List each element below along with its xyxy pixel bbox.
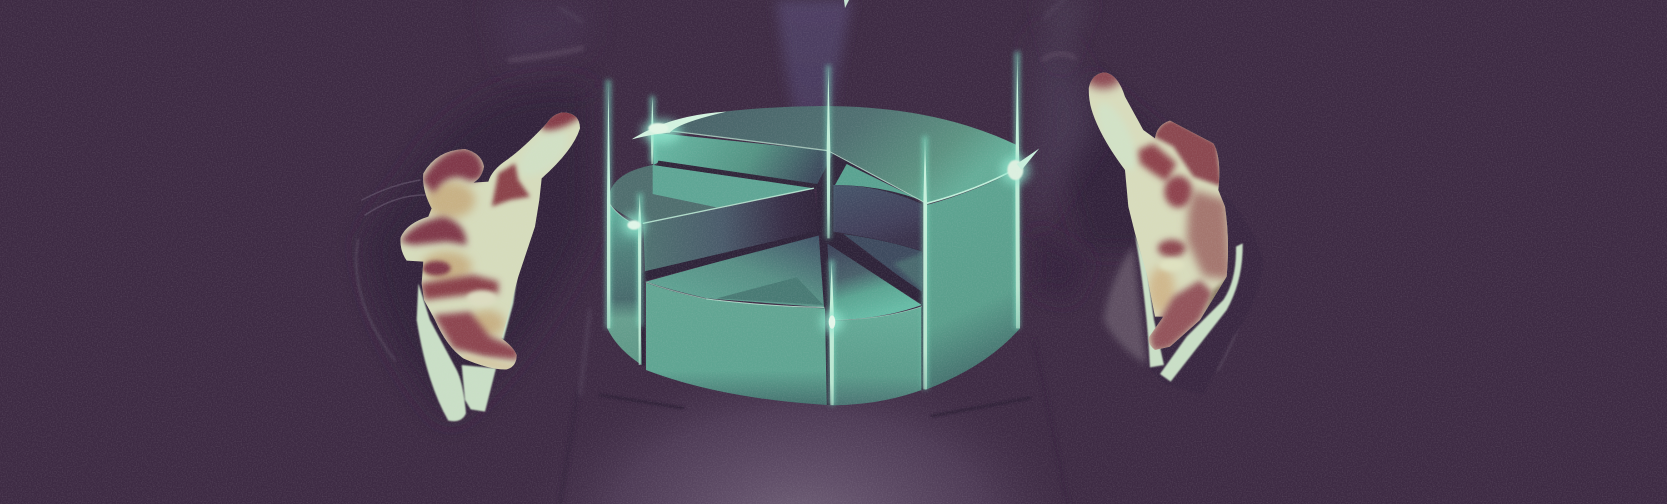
middle finger red <box>400 217 467 245</box>
thumb highlight <box>1094 108 1133 172</box>
jacket pocket flaps and folds <box>356 0 1250 504</box>
slice: front piece wall <box>646 283 827 405</box>
right shirt cuff <box>1135 235 1243 382</box>
glow halos <box>606 52 1020 405</box>
index finger red <box>422 148 483 193</box>
back of hand mottled <box>1187 190 1232 280</box>
thumb base red <box>492 163 530 207</box>
central gap <box>817 187 833 405</box>
left hand group <box>400 112 580 422</box>
thumb tip red <box>1089 72 1122 96</box>
thumb tip red <box>539 112 580 136</box>
ring finger <box>1158 240 1186 257</box>
palm tan shading <box>422 182 505 337</box>
sparkle: back left <box>632 112 727 144</box>
shirt tip at collar <box>844 0 849 8</box>
tie <box>776 0 852 140</box>
palm base <box>397 110 583 373</box>
slice: left piece outer wall <box>607 200 642 365</box>
right sleeve <box>1103 197 1263 395</box>
slice: left piece top surface <box>610 165 814 224</box>
slice: right inner surfaces <box>817 153 922 303</box>
sparkle: left <box>623 214 645 236</box>
slice: back slab top surface <box>663 106 1018 203</box>
slice: front right wedge wall <box>832 307 922 405</box>
slice: front right wedge top <box>827 243 922 320</box>
index finger red <box>1154 120 1222 187</box>
right hand <box>1088 72 1228 350</box>
slice: large right wall <box>925 168 1020 390</box>
palm base <box>1087 70 1233 357</box>
dark seam lines <box>643 273 923 390</box>
slice: left piece inner wall <box>643 189 820 272</box>
pie chart, in 3x coordinates <box>606 51 1039 405</box>
jacket silhouette <box>365 0 1180 420</box>
shirt lower torso glow <box>500 370 1100 504</box>
palm tan shading <box>1148 267 1175 313</box>
pinky red <box>1149 280 1213 352</box>
glowing vertical lines <box>607 51 1020 405</box>
back slab dark strip <box>657 161 820 189</box>
ring finger red <box>420 275 498 300</box>
middle finger red <box>1164 176 1192 208</box>
left shirt cuff <box>417 280 517 421</box>
sparkle: right <box>1000 148 1039 185</box>
left hand <box>400 112 580 370</box>
dark gap beside wedge <box>827 233 922 304</box>
pinky red <box>433 312 518 360</box>
right sleeve lit lapel <box>1103 247 1147 365</box>
glowing edge lines <box>607 130 1017 320</box>
sparkle: front <box>820 310 843 333</box>
slice: front piece top surface <box>643 231 824 307</box>
thumb highlights <box>548 152 566 172</box>
thumb base red <box>1138 143 1177 182</box>
slice: back slab wall <box>653 133 837 188</box>
knuckle red <box>423 261 451 276</box>
right hand group <box>1088 72 1252 382</box>
